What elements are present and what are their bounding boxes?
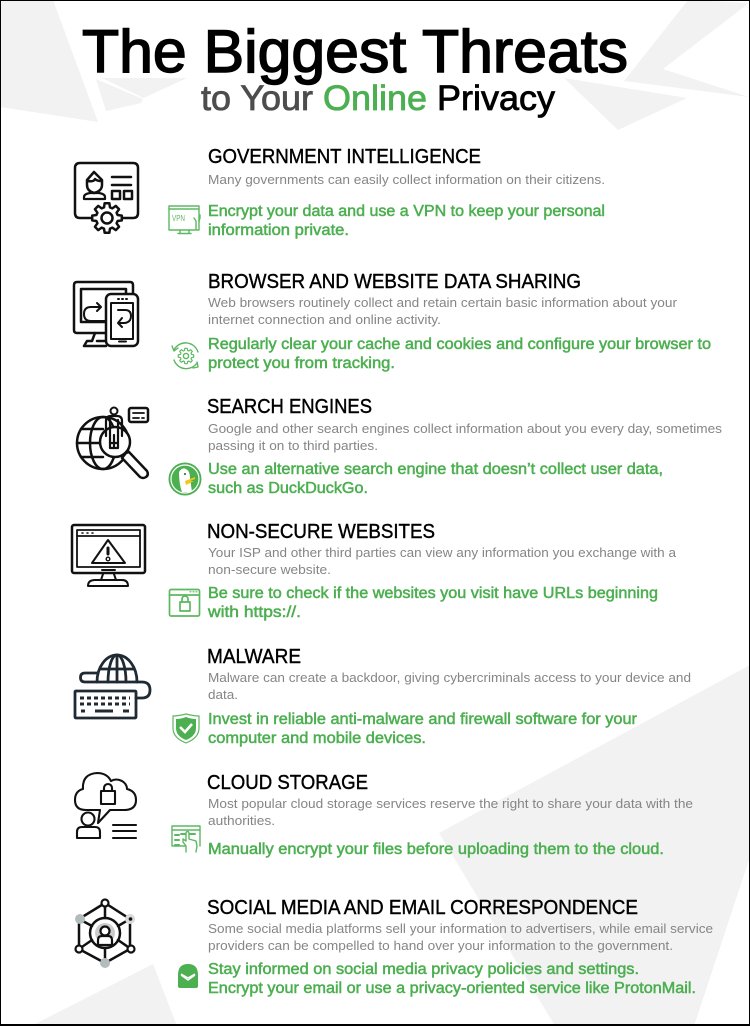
tip: Regularly clear your cache and cookies and configure your browser to [208, 336, 711, 353]
heading: MALWARE [207, 646, 301, 668]
description: Malware can create a backdoor, giving cybercriminals access to your device and [208, 670, 691, 685]
icon: shield [173, 714, 199, 743]
icon: browser and hand [172, 826, 200, 852]
section: malware [75, 646, 691, 747]
title [82, 18, 628, 118]
heading: GOVERNMENT INTELLIGENCE [208, 146, 481, 168]
section: malware: data. [208, 687, 238, 702]
heading: BROWSER AND WEBSITE DATA SHARING [208, 271, 581, 293]
tip: Invest in reliable anti-malware and firewall software for your [208, 711, 637, 728]
section: search engines: such as DuckDuckGo. [208, 480, 368, 497]
icon: network around a user [75, 900, 135, 968]
description: Some social media platforms sell your information to advertisers, while email service [208, 921, 713, 936]
section: non-secure websites: non-secure website. [208, 562, 331, 577]
description: Google and other search engines collect information about you every day, sometimes [208, 421, 723, 436]
icon: refresh gear [172, 343, 198, 369]
tip: Use an alternative search engine that doesn’t collect user data, [208, 461, 663, 478]
description: Most popular cloud storage services reserve the right to share your data with the [208, 796, 693, 811]
icon: cloud lock and person [75, 773, 136, 838]
section: government intelligence: information private. [208, 222, 349, 239]
section: social media and email correspondence: Encrypt your email or use a privacy-oriented service like ProtonMail. [208, 980, 696, 997]
tip: Manually encrypt your files before uploading them to the cloud. [208, 841, 664, 858]
section: browser and website data sharing [74, 271, 711, 372]
section: search engines [77, 396, 723, 497]
icon: browser lock [170, 590, 200, 616]
tip: Be sure to check if the websites you visit have URLs beginning [208, 585, 658, 602]
icon: ID card with gear [75, 163, 138, 233]
section: cloud storage: authorities. [208, 813, 275, 828]
icon: VPN monitor [169, 206, 200, 234]
description: Many governments can easily collect information on their citizens. [208, 172, 605, 187]
icon: ProtonMail envelope [178, 964, 198, 988]
section: non-secure websites: with https://. [207, 604, 301, 621]
icon: monitor warning [72, 525, 145, 586]
section: non-secure websites [72, 521, 677, 621]
icon: monitor and phone sync [74, 282, 138, 346]
section: government intelligence [75, 146, 605, 239]
section: cloud storage [75, 772, 693, 858]
icon: DuckDuckGo logo [168, 462, 202, 496]
description: Your ISP and other third parties can view any information you exchange with a [208, 545, 677, 560]
section: search engines: passing it on to third parties. [208, 438, 378, 453]
icon: globe, person and magnifier [77, 408, 148, 478]
heading: NON-SECURE WEBSITES [207, 521, 435, 543]
section: browser and website data sharing: protect you from tracking. [208, 355, 395, 372]
tip: Encrypt your data and use a VPN to keep your personal [208, 203, 605, 220]
icon: keyboard and globe [75, 655, 150, 718]
main heading: The Biggest Threats [82, 18, 628, 85]
section: social media and email correspondence [75, 897, 713, 997]
heading: SOCIAL MEDIA AND EMAIL CORRESPONDENCE [207, 897, 638, 919]
icon: VPN monitor: VPN [172, 214, 185, 223]
tip: Stay informed on social media privacy policies and settings. [208, 961, 639, 978]
heading: CLOUD STORAGE [207, 772, 368, 794]
section: browser and website data sharing: internet connection and online activity. [208, 312, 441, 327]
subtitle: to Your Online Privacy [201, 79, 556, 118]
section: social media and email correspondence: providers can be compelled to hand over your information to the government. [208, 938, 673, 953]
description: Web browsers routinely collect and retain certain basic information about your [208, 295, 678, 310]
heading: SEARCH ENGINES [207, 396, 372, 418]
section: malware: computer and mobile devices. [208, 730, 426, 747]
